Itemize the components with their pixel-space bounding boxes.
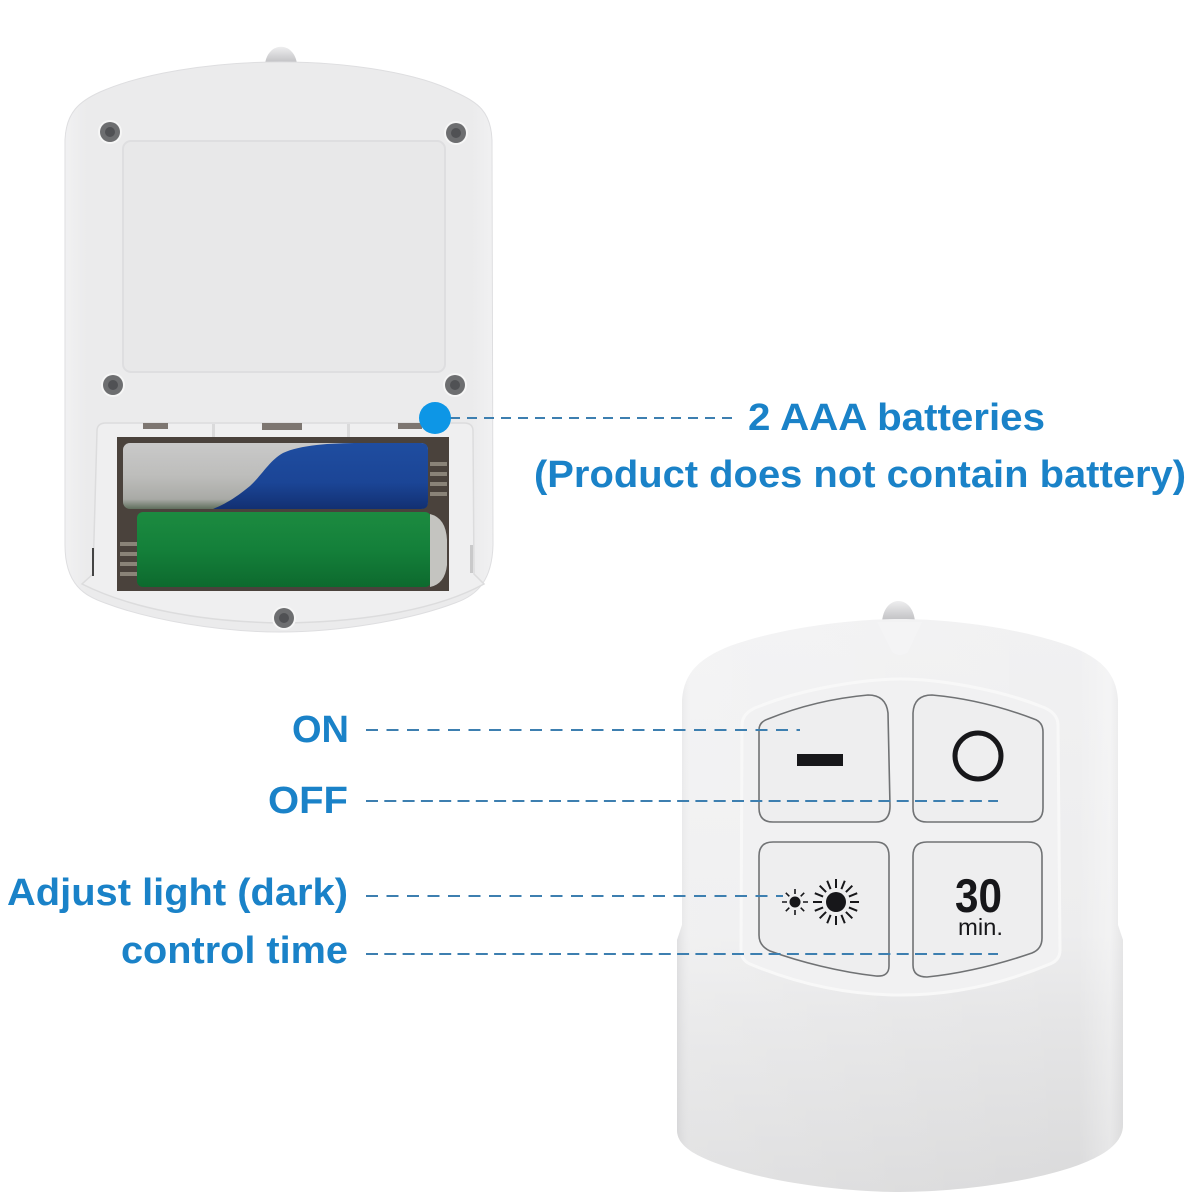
face plate: [741, 679, 1060, 995]
screw: top right: [444, 121, 468, 145]
label: control time: control time: [121, 930, 348, 972]
battery: green: [120, 512, 447, 587]
label: adjust light: Adjust light (dark): [7, 872, 348, 914]
label: on: ON: [292, 709, 349, 751]
callout text: no battery note: (Product does not contain battery): [534, 454, 1186, 496]
callout leader line: [450, 417, 736, 419]
battery bay: [117, 437, 449, 591]
screw: middle right: [443, 373, 467, 397]
front casing: [677, 619, 1123, 1192]
sensor bump: back: [265, 47, 297, 64]
device: front of remote: [677, 601, 1123, 1192]
latch marks: [92, 545, 473, 576]
button: off: [913, 695, 1043, 822]
callout: battery: [419, 397, 1045, 439]
button: timer: [913, 842, 1042, 977]
screw: bottom: [272, 606, 296, 630]
callout text: batteries: 2 AAA batteries: [748, 397, 1045, 439]
tab slots: [143, 423, 422, 437]
screw: middle left: [101, 373, 125, 397]
battery: silver and blue: [123, 443, 447, 509]
screw: top left: [98, 120, 122, 144]
sensor bump: front: [882, 601, 915, 622]
battery cover lip: [82, 423, 484, 623]
callout dot: [419, 402, 451, 434]
label: off: OFF: [268, 780, 348, 822]
sensor ridge: [877, 622, 922, 655]
icon: small sun: [782, 889, 808, 915]
back casing: [65, 62, 493, 632]
button: on: [759, 695, 890, 822]
label recess: [123, 141, 445, 372]
icon: large sun: [813, 879, 859, 925]
button: timer: 30: [955, 869, 1002, 922]
button: timer: min.: [958, 914, 1003, 940]
casing side shading: [677, 619, 1123, 1192]
button: brightness: [759, 842, 889, 976]
device: back of remote with battery compartment: [65, 47, 493, 632]
